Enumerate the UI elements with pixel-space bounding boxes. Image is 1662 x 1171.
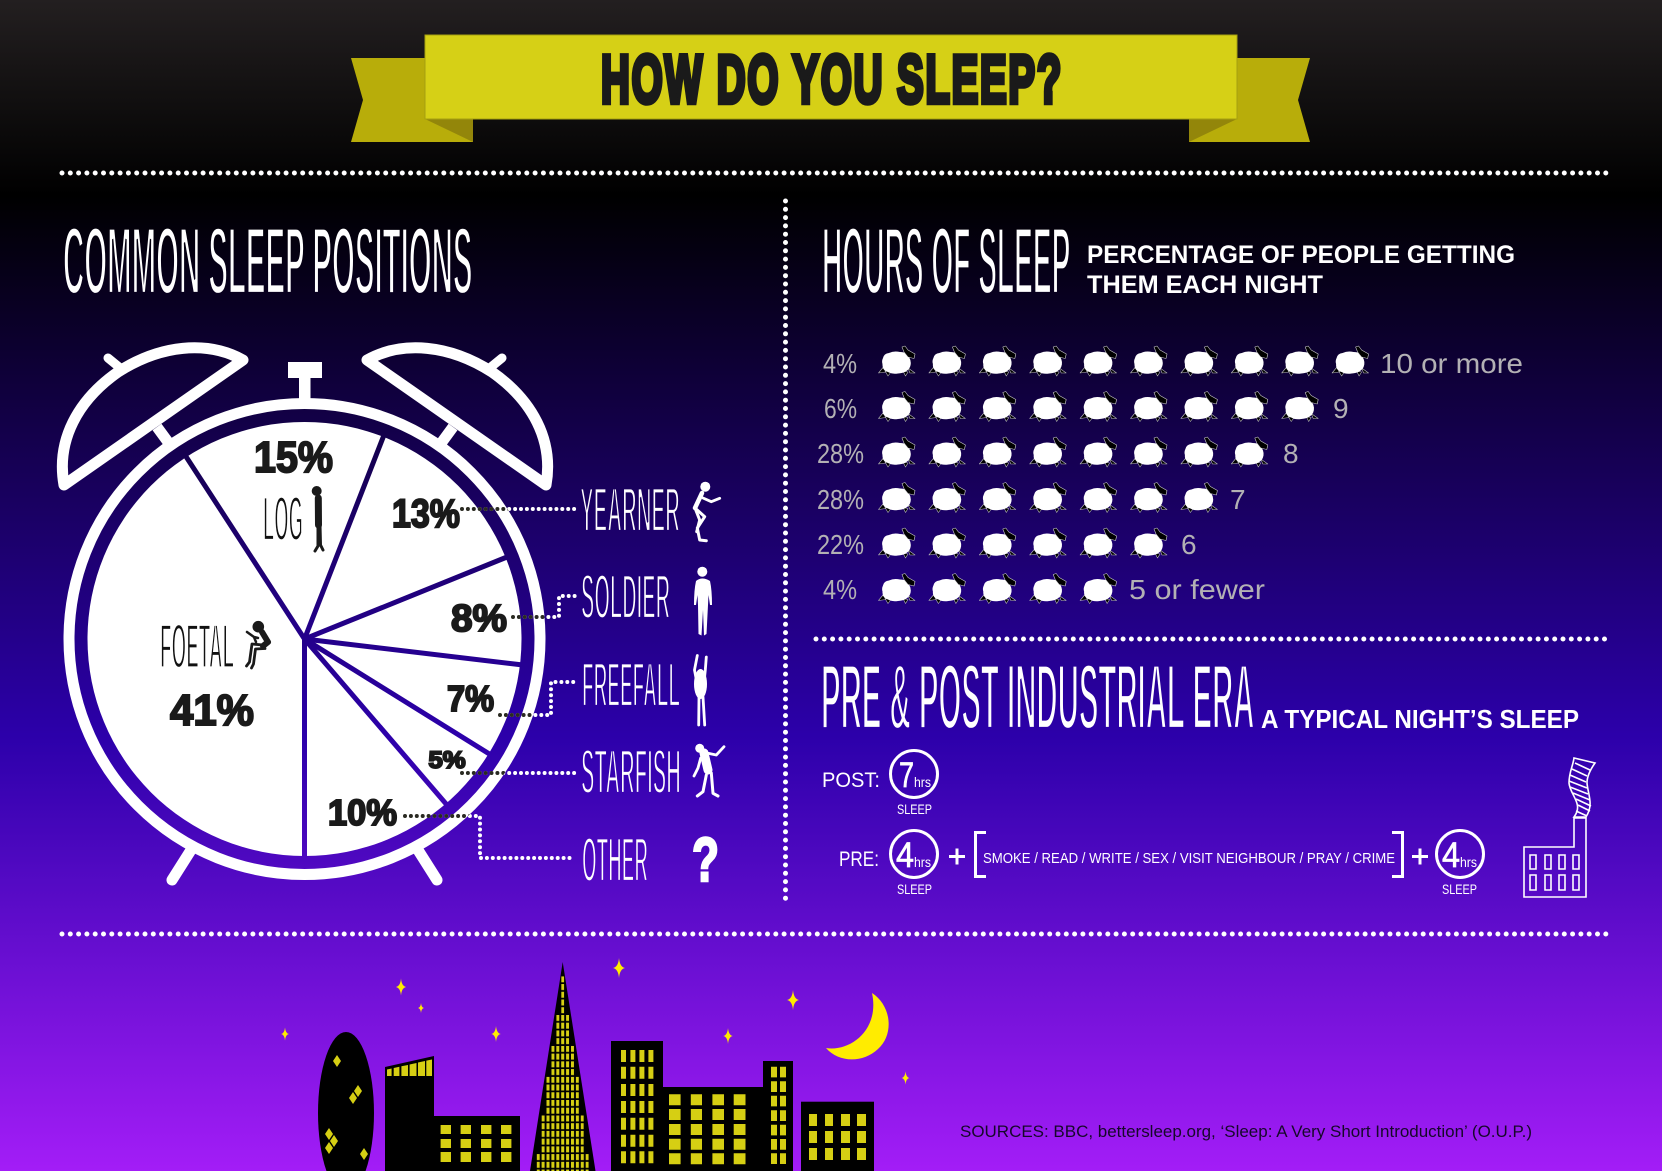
clock top button xyxy=(288,362,322,400)
subheading: percentage of people: PERCENTAGE OF PEOPLE GETTING xyxy=(1087,241,1515,269)
post-industrial sleep: 7 xyxy=(899,756,914,795)
pre-industrial sleep: hrs xyxy=(1460,855,1477,870)
heading: pre and post industrial era: PRE & POST INDUSTRIAL ERA xyxy=(821,644,1255,749)
title banner: HOW DO YOU SLEEP? xyxy=(601,41,1063,117)
building: tall left block xyxy=(611,1041,793,1171)
sheep chart: 9: 6% xyxy=(824,393,857,424)
building: spire tower xyxy=(530,962,596,1171)
pie face xyxy=(88,422,522,856)
position legend: starfish xyxy=(581,737,724,809)
position legend: starfish: STARFISH xyxy=(581,737,681,809)
sheep chart: 8: 28% xyxy=(817,438,864,469)
sheep chart: 9: 9 xyxy=(1333,393,1349,424)
sheep chart: 7: 28% xyxy=(817,484,864,515)
building: right block xyxy=(801,1102,874,1171)
position legend: other xyxy=(582,825,719,897)
label: 5%: 5% xyxy=(428,747,466,774)
sheep chart: 10 or more: 4% xyxy=(823,348,857,379)
sheep chart: 10 or more: 10 or more xyxy=(1380,348,1523,379)
sheep chart: 6 xyxy=(817,528,1197,560)
icon: question mark: ? xyxy=(692,826,719,895)
label: 7%: 7% xyxy=(447,678,494,719)
label: 8%: 8% xyxy=(451,598,507,640)
sources: SOURCES: BBC, bettersleep.org, ‘Sleep: A Very Short Introduction’ (O.U.P.) xyxy=(960,1122,1532,1141)
sheep chart: 10 or more xyxy=(823,346,1523,379)
label: foetal: FOETAL xyxy=(160,612,234,683)
icon: crescent moon xyxy=(826,993,889,1059)
post-industrial sleep xyxy=(822,750,938,817)
label: 10%: 10% xyxy=(328,792,397,833)
clock outer ring xyxy=(69,404,540,874)
subheading: typical night: A TYPICAL NIGHT’S SLEEP xyxy=(1261,704,1579,734)
heading: pre and post industrial era xyxy=(821,644,1579,749)
sheep chart: 5 or fewer: 4% xyxy=(823,574,857,605)
stars xyxy=(281,958,909,1084)
post-industrial sleep: hrs xyxy=(914,775,931,790)
sheep chart: 7: 7 xyxy=(1230,484,1246,515)
sheep chart: 8 xyxy=(817,437,1299,469)
pre-industrial sleep xyxy=(839,830,1484,897)
post-industrial sleep: POST: xyxy=(822,769,880,792)
icon: starfish figure xyxy=(694,744,724,796)
heading: hours of sleep: HOURS OF SLEEP xyxy=(822,207,1070,316)
icon: factory with smoke xyxy=(1524,758,1595,897)
sheep chart: 6: 6 xyxy=(1181,529,1197,560)
icon: freefall figure xyxy=(694,656,707,725)
position legend: soldier xyxy=(581,562,712,636)
pre-industrial sleep: PRE: xyxy=(839,848,879,871)
icon: soldier figure xyxy=(694,567,712,636)
pie wedge dividers xyxy=(185,435,523,857)
city skyline xyxy=(318,962,874,1171)
pre-industrial sleep: 4 xyxy=(896,836,914,875)
alarm clock pie chart xyxy=(62,348,548,880)
icon: log figure xyxy=(312,486,323,551)
sheep chart: 6: 22% xyxy=(817,529,864,560)
label: 41%: 41% xyxy=(170,686,254,735)
subheading: percentage of people xyxy=(1087,241,1515,299)
position legend: yearner: YEARNER xyxy=(580,475,680,547)
sheep chart: 8: 8 xyxy=(1283,438,1299,469)
icon: foetal figure xyxy=(246,621,268,668)
label: 13%: 13% xyxy=(392,492,460,536)
label: log: LOG xyxy=(263,484,303,556)
position legend: yearner xyxy=(580,475,720,547)
clock bells xyxy=(62,348,548,880)
sheep chart: 9 xyxy=(824,392,1349,424)
sheep chart: 5 or fewer: 5 or fewer xyxy=(1129,574,1265,605)
position legend: other: OTHER xyxy=(582,825,648,897)
sheep chart: 7 xyxy=(817,482,1246,515)
label: 15% log: 15% xyxy=(254,433,333,482)
pre-industrial sleep: SLEEP xyxy=(1442,881,1477,897)
heading: hours of sleep xyxy=(822,207,1515,316)
building: angled roof block xyxy=(385,1056,520,1171)
icon: yearner figure xyxy=(695,482,720,541)
post-industrial sleep: SLEEP xyxy=(897,801,932,817)
sheep chart: 5 or fewer xyxy=(823,574,1265,605)
position legend: soldier: SOLDIER xyxy=(581,562,670,634)
building: gherkin xyxy=(318,1032,374,1171)
title banner xyxy=(351,35,1310,142)
subheading: percentage of people: THEM EACH NIGHT xyxy=(1087,271,1323,299)
pre-industrial sleep: SLEEP xyxy=(897,881,932,897)
leader lines from pie to labels xyxy=(405,509,577,858)
heading: common sleep positions: COMMON SLEEP POSITIONS xyxy=(63,207,473,316)
pre-industrial sleep: SMOKE / READ / WRITE / SEX / VISIT NEIGHBOUR / PRAY / CRIME xyxy=(983,850,1395,867)
position legend: freefall: FREEFALL xyxy=(582,650,680,722)
pre-industrial sleep: hrs xyxy=(914,855,931,870)
pre-industrial sleep: 4 xyxy=(1442,836,1460,875)
